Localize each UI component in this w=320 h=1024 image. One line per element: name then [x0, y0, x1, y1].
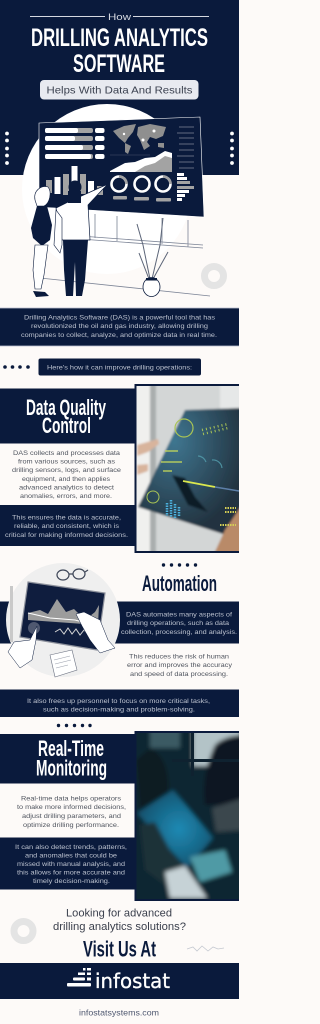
text block	[127, 654, 233, 678]
text block: equipment, and then applies	[22, 476, 111, 483]
text band: timely decision-making.	[33, 878, 110, 885]
panel: header background	[0, 0, 239, 175]
call to action text: drilling analytics solutions?	[53, 921, 186, 933]
gauge pills	[113, 196, 171, 202]
dots row	[57, 724, 92, 727]
text band: This ensures the data is accurate,	[12, 514, 121, 522]
horizontal bars	[177, 173, 194, 201]
heading band: Real-Time	[38, 736, 104, 761]
full-width band: It also frees up personnel to focus on more critical tasks,	[27, 698, 210, 705]
text block: anomalies, errors, and more.	[20, 493, 112, 500]
subtitle pill	[40, 80, 198, 100]
hero illustration	[5, 104, 234, 297]
panel: intro: revolutionized the oil and gas industry, allowing drilling	[31, 323, 208, 330]
heading band: Monitoring	[36, 756, 107, 780]
logo wordmark: infostat	[95, 969, 170, 993]
person: woman	[31, 187, 52, 297]
icon: decorative donut	[14, 922, 33, 940]
text block: This reduces the risk of human	[129, 654, 229, 660]
call to action text	[53, 908, 186, 933]
website url: infostatsystems.com	[79, 1007, 159, 1017]
text block: drilling sensors, logs, and surface	[12, 467, 121, 474]
text block: from various sources, such as	[18, 458, 116, 466]
plant	[137, 218, 168, 296]
text block: DAS collects and processes data	[13, 450, 120, 457]
callout: how it can improve: Here's how it can improve drilling operations:	[47, 364, 192, 372]
band text: collection, processing, and analysis.	[121, 629, 237, 636]
text band: and anomalies that could be	[25, 852, 117, 860]
area chart	[110, 151, 172, 172]
icon: decorative wave	[187, 946, 224, 951]
full-width band: such as decision-making and problem-solving.	[43, 706, 195, 714]
panel: intro: Drilling Analytics Software (DAS) is a powerful tool that has	[24, 314, 216, 322]
photo: tablet in hands	[134, 731, 239, 901]
text block	[12, 450, 121, 500]
dots left	[5, 132, 9, 165]
progress bars	[45, 128, 104, 159]
dashboard screen	[39, 117, 204, 217]
callout: how it can improve	[38, 358, 201, 376]
text band: reliable, and consistent, which is	[14, 523, 120, 530]
panel: data quality control	[0, 380, 242, 556]
text block: advanced analytics to detect	[19, 484, 114, 492]
text band: critical for making informed decisions.	[5, 532, 128, 539]
text block: adjust drilling parameters, and	[22, 813, 121, 820]
band text	[121, 612, 237, 636]
right labels	[177, 127, 194, 168]
photo: tablet dashboard	[134, 384, 239, 553]
panel: real-time monitoring	[0, 728, 244, 904]
panel: logo band	[0, 963, 239, 999]
text band	[0, 505, 135, 546]
panel: intro	[0, 308, 241, 346]
dots right	[230, 132, 234, 165]
window frame behind	[40, 214, 210, 296]
text band	[0, 838, 135, 890]
subtitle pill: Helps With Data And Results	[46, 84, 192, 96]
text block: error and improves the accuracy	[127, 662, 233, 669]
text band: missed with manual analysis, and	[17, 861, 125, 868]
icon: logo mark	[67, 968, 91, 986]
text block: optimize drilling performance.	[23, 822, 119, 829]
panel: automation	[0, 563, 239, 717]
heading band: Data Quality	[26, 395, 106, 420]
illustration: tablet and hands	[6, 563, 120, 677]
text band: this allows for more accurate and	[17, 870, 125, 876]
band	[0, 602, 239, 644]
world map	[113, 124, 166, 154]
heading band: Control	[42, 413, 91, 438]
panel: intro: companies to collect, analyze, and optimize data in real time.	[21, 332, 217, 339]
band text: DAS automates many aspects of	[126, 612, 232, 618]
decor donut	[204, 266, 224, 286]
heading band	[0, 388, 135, 444]
full-width band	[0, 690, 239, 717]
title block	[30, 12, 209, 78]
title block: How	[108, 12, 131, 23]
person: man	[54, 180, 110, 296]
text band: It can also detect trends, patterns,	[15, 844, 127, 851]
column chart	[46, 166, 103, 195]
text block: to make more informed decisions,	[17, 804, 126, 811]
title block: SOFTWARE	[73, 50, 165, 78]
text block: and speed of data processing.	[130, 671, 228, 678]
text block	[17, 796, 126, 829]
band text: drilling operations, such as data	[127, 620, 229, 627]
text block: Real-time data helps operators	[21, 796, 122, 802]
dots row	[162, 563, 197, 567]
dots row	[3, 365, 30, 369]
donut gauges	[112, 176, 170, 192]
heading band	[0, 734, 135, 784]
heading: visit us at: Visit Us At	[83, 936, 156, 962]
call to action text: Looking for advanced	[66, 908, 172, 920]
